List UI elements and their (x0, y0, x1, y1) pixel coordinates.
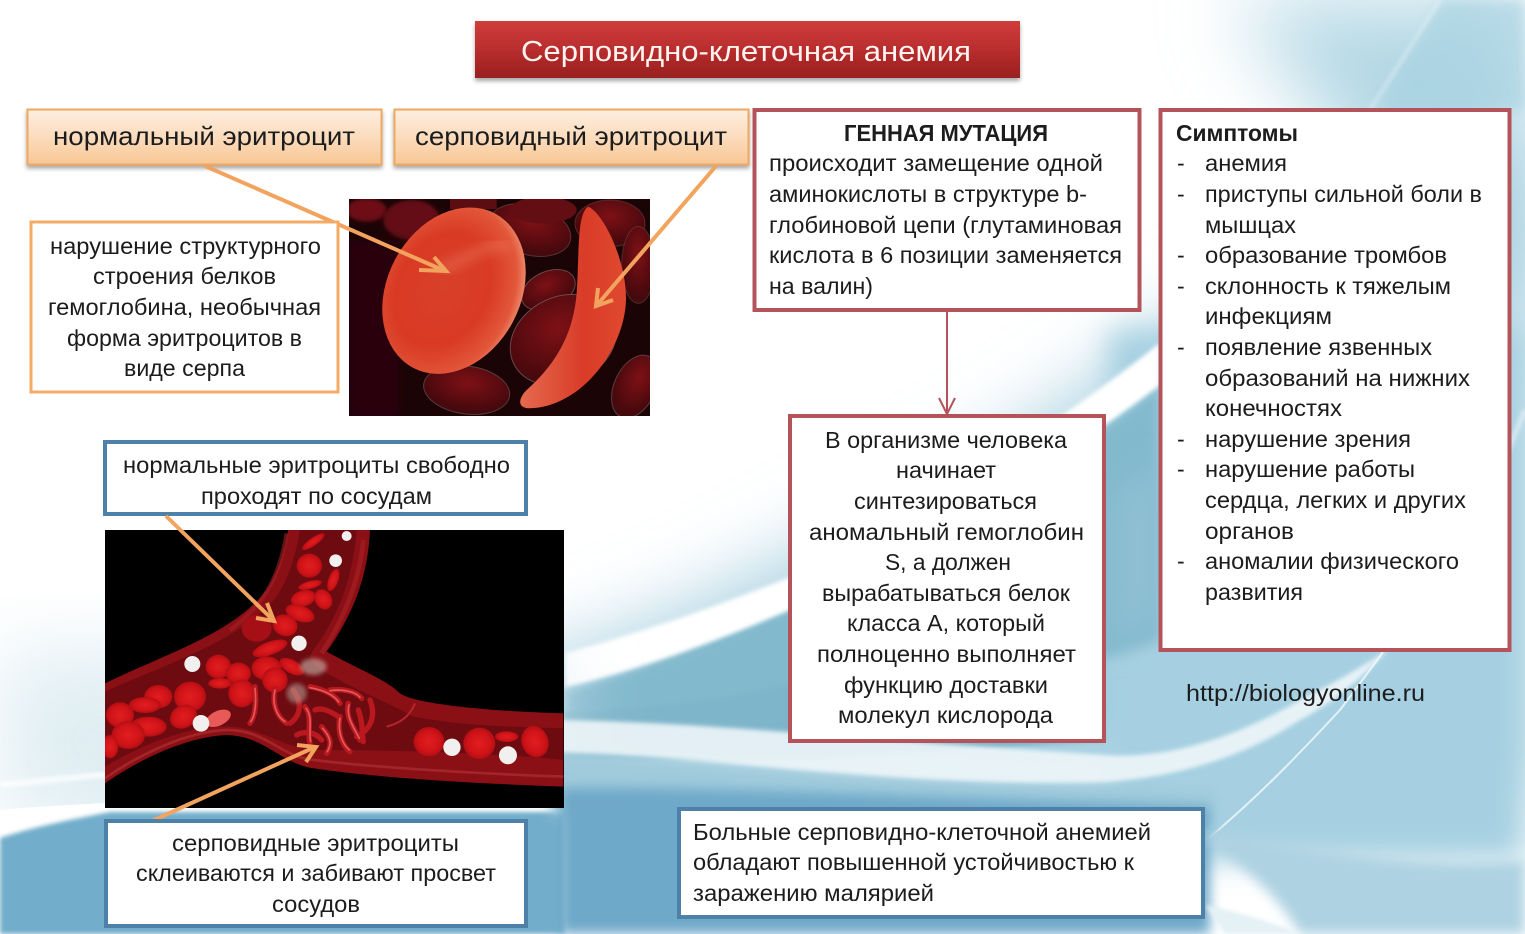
panel: symptoms: - (1177, 456, 1185, 482)
text box: structural disorder: строения белков (93, 263, 276, 289)
text box: sickled cells clog vessels: серповидные эритроциты (172, 830, 459, 856)
panel: abnormal hemoglobin: полноценно выполняет (817, 641, 1076, 667)
panel: abnormal hemoglobin: синтезироваться (854, 488, 1037, 514)
panel: gene mutation: ГЕННАЯ МУТАЦИЯ (844, 120, 1048, 146)
panel: symptoms: Симптомы (1176, 120, 1298, 146)
panel: symptoms: приступы сильной боли в (1205, 181, 1482, 207)
text box: malaria resistance (679, 809, 1203, 917)
panel: gene mutation: происходит замещение одной (769, 150, 1103, 176)
panel: abnormal hemoglobin: вырабатываться белок (822, 580, 1071, 606)
panel: abnormal hemoglobin: аномальный гемоглобин (809, 519, 1084, 545)
text box: structural disorder: виде серпа (124, 355, 245, 381)
text box: sickled cells clog vessels (106, 821, 526, 926)
text box: structural disorder: гемоглобина, необычная (48, 294, 321, 320)
text box: sickled cells clog vessels: сосудов (272, 891, 360, 917)
panel: symptoms: - (1177, 548, 1185, 574)
panel: symptoms: мышцах (1205, 212, 1297, 238)
text box: normal cells pass freely: нормальные эритроциты свободно (123, 452, 510, 478)
title: Серповидно-клеточная анемия (521, 36, 971, 68)
panel: symptoms: нарушение работы (1205, 456, 1415, 482)
image: blood vessel with cells (102, 530, 564, 808)
source link: http://biologyonline.ru (1186, 680, 1425, 706)
lower white arc (550, 648, 1390, 783)
panel: gene mutation (754, 110, 1140, 310)
text box: sickled cells clog vessels: склеиваются и забивают просвет (136, 860, 496, 886)
panel: symptoms: образование тромбов (1205, 242, 1447, 268)
panel: symptoms: - (1177, 273, 1185, 299)
label: sickle erythrocyte: серповидный эритроцит (415, 121, 727, 151)
arrow: label to normal cell (205, 166, 446, 271)
panel: symptoms: образований на нижних (1205, 365, 1471, 391)
panel: symptoms: - (1177, 242, 1185, 268)
left blue and lower bands (0, 650, 560, 830)
arrow: sickled cells in vessel (152, 745, 316, 821)
panel: abnormal hemoglobin: В организме человека (825, 427, 1067, 453)
panel: symptoms: конечностях (1205, 395, 1343, 421)
panel: symptoms: сердца, легких и других (1205, 487, 1467, 513)
panel: symptoms: склонность к тяжелым (1205, 273, 1451, 299)
sickled cells (250, 687, 373, 753)
label: normal erythrocyte: нормальный эритроцит (53, 121, 355, 151)
panel: abnormal hemoglobin: молекул кислорода (838, 702, 1053, 728)
panel: symptoms: инфекциям (1205, 303, 1332, 329)
title (475, 21, 1020, 78)
panel: symptoms: органов (1205, 518, 1294, 544)
text box: normal cells pass freely: проходят по сосудам (201, 483, 432, 509)
panel: gene mutation: аминокислоты в структуре b- (769, 181, 1087, 207)
arrow: label to sickle cell (596, 166, 716, 306)
label: normal erythrocyte (28, 110, 382, 164)
text box: structural disorder: форма эритроцитов в (67, 325, 302, 351)
panel: abnormal hemoglobin (790, 416, 1104, 741)
text box: malaria resistance: обладают повышенной устойчивостью к (693, 849, 1135, 875)
panel: abnormal hemoglobin: S, а должен (885, 549, 1011, 575)
sickle cell (520, 207, 626, 408)
arrow: mutation to hemoglobin (939, 311, 955, 414)
panel: symptoms (1160, 110, 1510, 650)
panel: abnormal hemoglobin: функцию доставки (844, 672, 1048, 698)
panel: abnormal hemoglobin: класса А, который (847, 610, 1045, 636)
normal red cells (102, 531, 553, 761)
label: sickle erythrocyte (394, 110, 748, 164)
vessel wall (105, 530, 563, 787)
panel: symptoms: - (1177, 334, 1185, 360)
normal cell (382, 208, 526, 374)
arrow: normal cells in vessel (166, 516, 274, 621)
panel: symptoms: - (1177, 426, 1185, 452)
panel: symptoms: нарушение зрения (1205, 426, 1411, 452)
text box: structural disorder (31, 222, 338, 392)
panel: symptoms: - (1177, 181, 1185, 207)
panel: symptoms: - (1177, 150, 1185, 176)
panel: symptoms: развития (1205, 579, 1303, 605)
text box: normal cells pass freely (105, 442, 526, 514)
panel: symptoms: анемия (1205, 150, 1287, 176)
panel: gene mutation: на валин) (769, 273, 873, 299)
panel: abnormal hemoglobin: начинает (896, 457, 996, 483)
white band (565, 343, 1160, 687)
panel: symptoms: аномалии физического (1205, 548, 1459, 574)
white blood cells (184, 531, 517, 764)
panel: gene mutation: глобиновой цепи (глутаминовая (769, 212, 1122, 238)
panel: symptoms: появление язвенных (1205, 334, 1433, 360)
text box: malaria resistance: Больные серповидно-клеточной анемией (693, 819, 1151, 845)
image: red blood cells (349, 199, 650, 416)
text box: structural disorder: нарушение структурного (50, 233, 321, 259)
text box: malaria resistance: заражению малярией (693, 880, 934, 906)
panel: gene mutation: кислота в 6 позиции заменяется (769, 242, 1122, 268)
